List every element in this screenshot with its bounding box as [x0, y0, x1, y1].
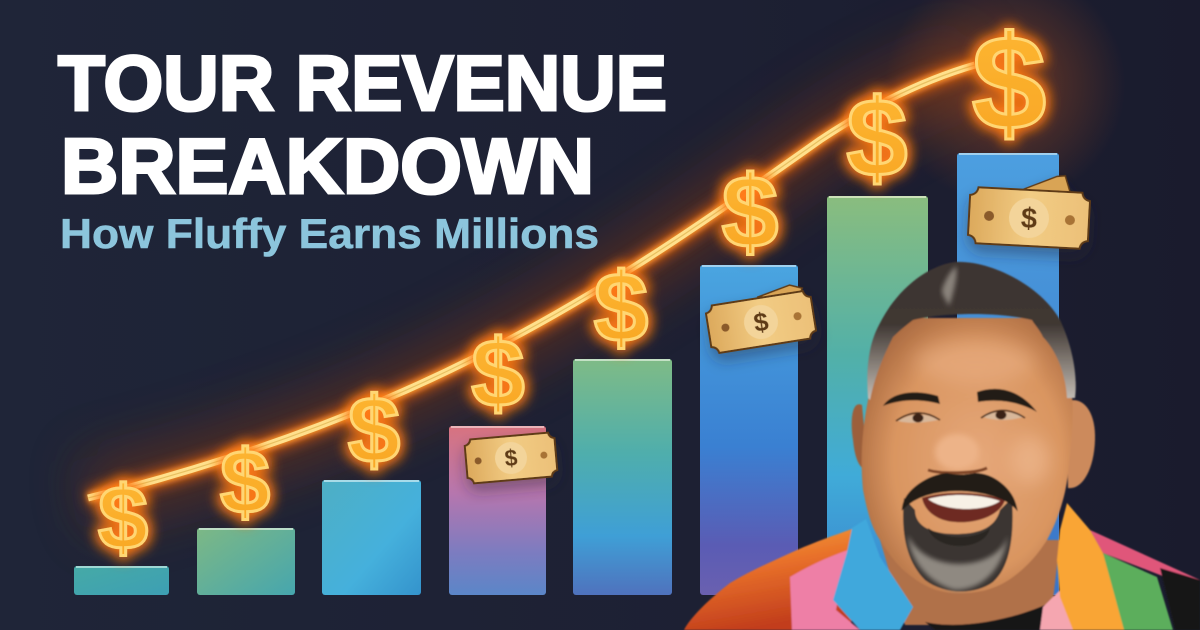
- dollar sign 2: $: [220, 433, 270, 533]
- right eye: [981, 410, 1025, 420]
- hair grey streak: [942, 266, 957, 306]
- dollar sign 3: $: [348, 377, 400, 482]
- bar 6: [700, 265, 798, 595]
- bar chart: [74, 153, 1059, 595]
- portrait of man: [684, 262, 1200, 630]
- teeth: [928, 495, 1000, 509]
- black t-shirt: [925, 605, 1050, 630]
- inner pink shirt: [1040, 590, 1075, 630]
- dollar sign 1: $: [98, 469, 148, 569]
- neon dollar signs: [98, 9, 1046, 569]
- moustache: [903, 474, 1016, 508]
- subtitle: How Fluffy Earns Millions: [60, 210, 599, 257]
- right ear: [1066, 400, 1095, 488]
- nose: [928, 434, 987, 473]
- dollar sign 6: $: [722, 155, 778, 269]
- jacket orange collar: [1057, 503, 1124, 630]
- jacket black panel: [1160, 568, 1200, 630]
- neon trend line: [88, 65, 975, 498]
- banknote on bar 4: $: [503, 444, 519, 472]
- title: [58, 39, 667, 210]
- bar 4: [449, 426, 546, 595]
- halo around top dollar: [885, 0, 1125, 205]
- dollar sign 4: $: [471, 320, 525, 427]
- title line 2: BREAKDOWN: [61, 122, 594, 210]
- mouth: [922, 493, 1005, 522]
- bar 5: [573, 359, 672, 595]
- forehead highlight: [915, 340, 1035, 384]
- jacket left shoulder: [684, 529, 860, 630]
- jacket green panel: [1103, 553, 1173, 630]
- jacket blue collar: [833, 519, 913, 630]
- banknote on bar 8: $: [1020, 203, 1038, 235]
- bar 7: [827, 196, 928, 595]
- warm glow behind curve: [88, 65, 975, 498]
- left eye: [896, 413, 940, 423]
- neck: [880, 540, 1060, 625]
- goatee: [903, 498, 1013, 592]
- banknote on bar 6: [704, 282, 817, 354]
- title line 1: TOUR REVENUE: [58, 39, 667, 127]
- face: [862, 318, 1073, 593]
- cheek highlight: [1010, 436, 1050, 484]
- dollar sign 8: $: [972, 9, 1046, 158]
- soul patch: [928, 528, 990, 546]
- jacket pink panel: [790, 550, 860, 630]
- bar 8: [957, 153, 1059, 595]
- dollar sign 5: $: [594, 252, 648, 362]
- banknote on bar 4: [464, 432, 558, 484]
- dollar sign 7: $: [846, 77, 908, 200]
- left eyebrow: [883, 392, 940, 406]
- right eyebrow: [977, 389, 1037, 412]
- banknote on bar 8: [968, 171, 1091, 249]
- bar 2: [197, 528, 295, 595]
- jacket right pink band: [1090, 530, 1200, 590]
- goatee grey highlight: [908, 535, 1008, 590]
- hair: [867, 262, 1076, 400]
- bar 3: [322, 480, 421, 595]
- jacket: [684, 503, 1200, 630]
- left ear: [852, 404, 868, 470]
- bar 1: [74, 566, 169, 595]
- banknote on bar 6: $: [752, 306, 771, 338]
